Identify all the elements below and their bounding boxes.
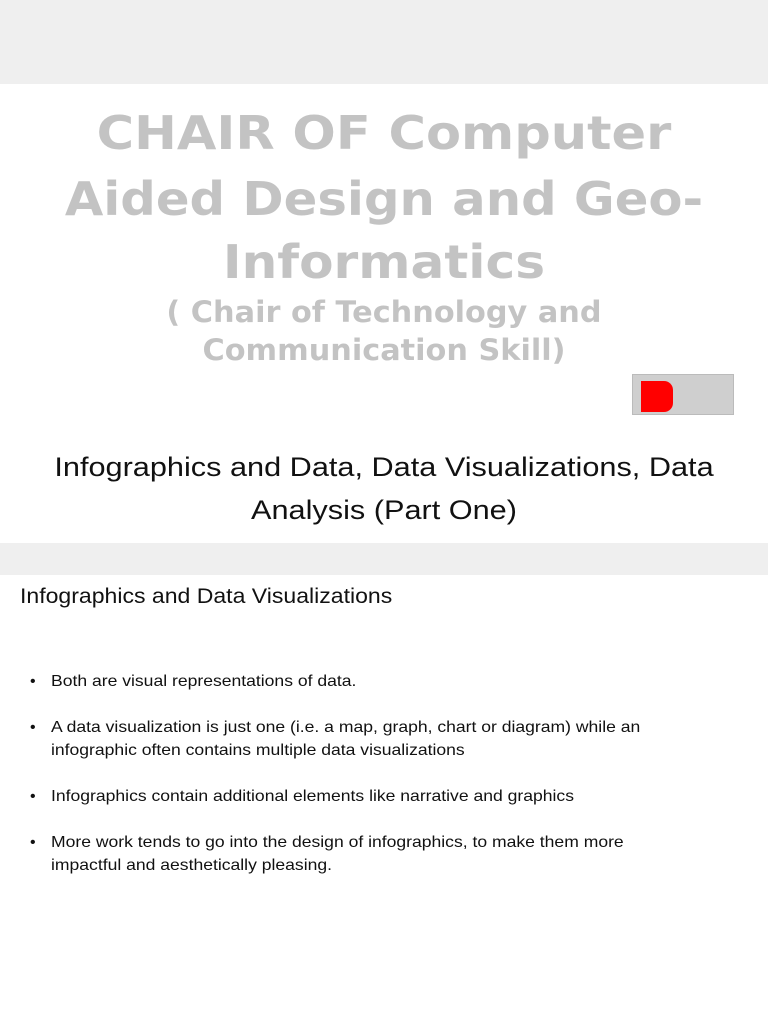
bullet list: infographic often contains multiple data visualizations: [51, 742, 465, 759]
title: Aided Design and Geo-: [65, 172, 703, 226]
title: [65, 106, 703, 367]
slide heading: Infographics and Data, Data Visualizations, Data: [54, 452, 714, 482]
title: ( Chair of Technology and: [166, 295, 602, 329]
bullet list: Infographics contain additional elements like narrative and graphics: [51, 788, 574, 805]
bullet list: •: [30, 719, 36, 736]
slide heading: [54, 452, 714, 525]
bullet list: •: [30, 673, 36, 690]
bullet list: Both are visual representations of data.: [51, 673, 356, 690]
bullet list: •: [30, 834, 36, 851]
title: CHAIR OF Computer: [97, 106, 671, 160]
section heading: Infographics and Data Visualizations: [20, 585, 392, 608]
slide heading: Analysis (Part One): [251, 495, 517, 525]
bullet list: A data visualization is just one (i.e. a map, graph, chart or diagram) while an: [51, 719, 640, 736]
title: Communication Skill): [202, 333, 565, 367]
logo: [632, 374, 734, 415]
bullet list: More work tends to go into the design of infographics, to make them more: [51, 834, 624, 851]
bullet list: [30, 673, 640, 874]
bullet list: •: [30, 788, 36, 805]
title: Informatics: [223, 235, 545, 289]
bullet list: impactful and aesthetically pleasing.: [51, 857, 332, 874]
